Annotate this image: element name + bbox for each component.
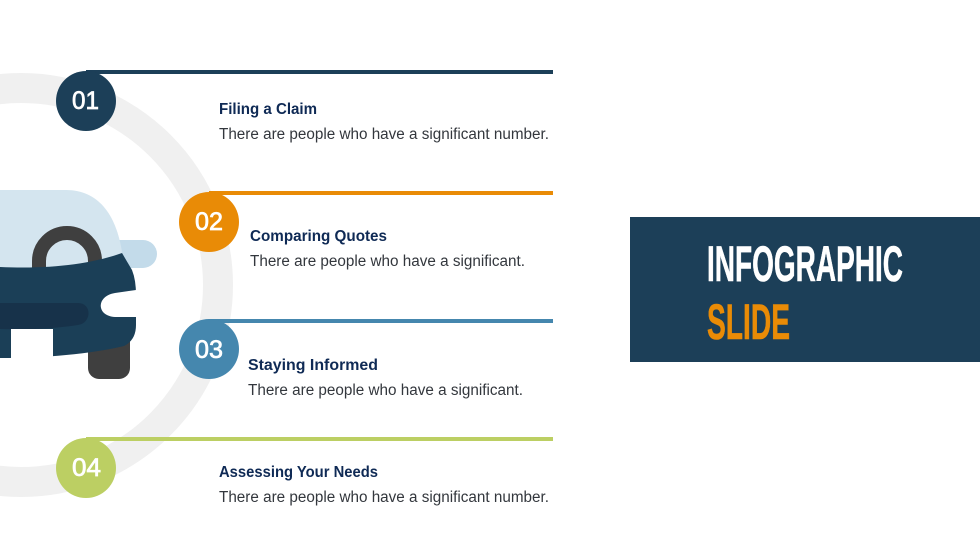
- rule 04: [86, 437, 553, 441]
- text 03: There are people who have a significant.: [248, 382, 523, 399]
- heading 03: Staying Informed: [248, 357, 378, 374]
- number 01: 01: [72, 87, 99, 115]
- item 01: [56, 70, 553, 143]
- title panel: [630, 217, 980, 362]
- badge 03: [179, 319, 239, 379]
- grille: [0, 303, 88, 329]
- background ring: [0, 88, 218, 482]
- title line 2: SLIDE: [707, 294, 790, 350]
- rule 03: [209, 319, 553, 323]
- number 02: 02: [195, 208, 223, 236]
- steering wheel: [39, 233, 95, 268]
- heading 02: Comparing Quotes: [250, 228, 387, 245]
- number 04: 04: [72, 454, 101, 482]
- text 02: There are people who have a significant.: [250, 253, 525, 270]
- car roof: [0, 190, 122, 290]
- item 04: [56, 437, 553, 506]
- car body: [0, 253, 136, 358]
- item 02: [179, 191, 553, 270]
- rule 01: [86, 70, 553, 74]
- text 04: There are people who have a significant number.: [219, 489, 549, 506]
- number 03: 03: [195, 336, 223, 364]
- badge 04: [56, 438, 116, 498]
- badge 02: [179, 192, 239, 252]
- panel background: [630, 217, 980, 362]
- text 01: There are people who have a significant number.: [219, 126, 549, 143]
- number plate: [11, 329, 53, 358]
- icon: car front: [0, 190, 157, 379]
- rule 02: [209, 191, 553, 195]
- heading 04: Assessing Your Needs: [219, 464, 378, 481]
- item 03: [179, 319, 553, 399]
- tyre: [88, 325, 130, 379]
- headlight: [101, 290, 136, 317]
- heading 01: Filing a Claim: [219, 101, 317, 118]
- badge 01: [56, 71, 116, 131]
- car mirror: [100, 240, 157, 268]
